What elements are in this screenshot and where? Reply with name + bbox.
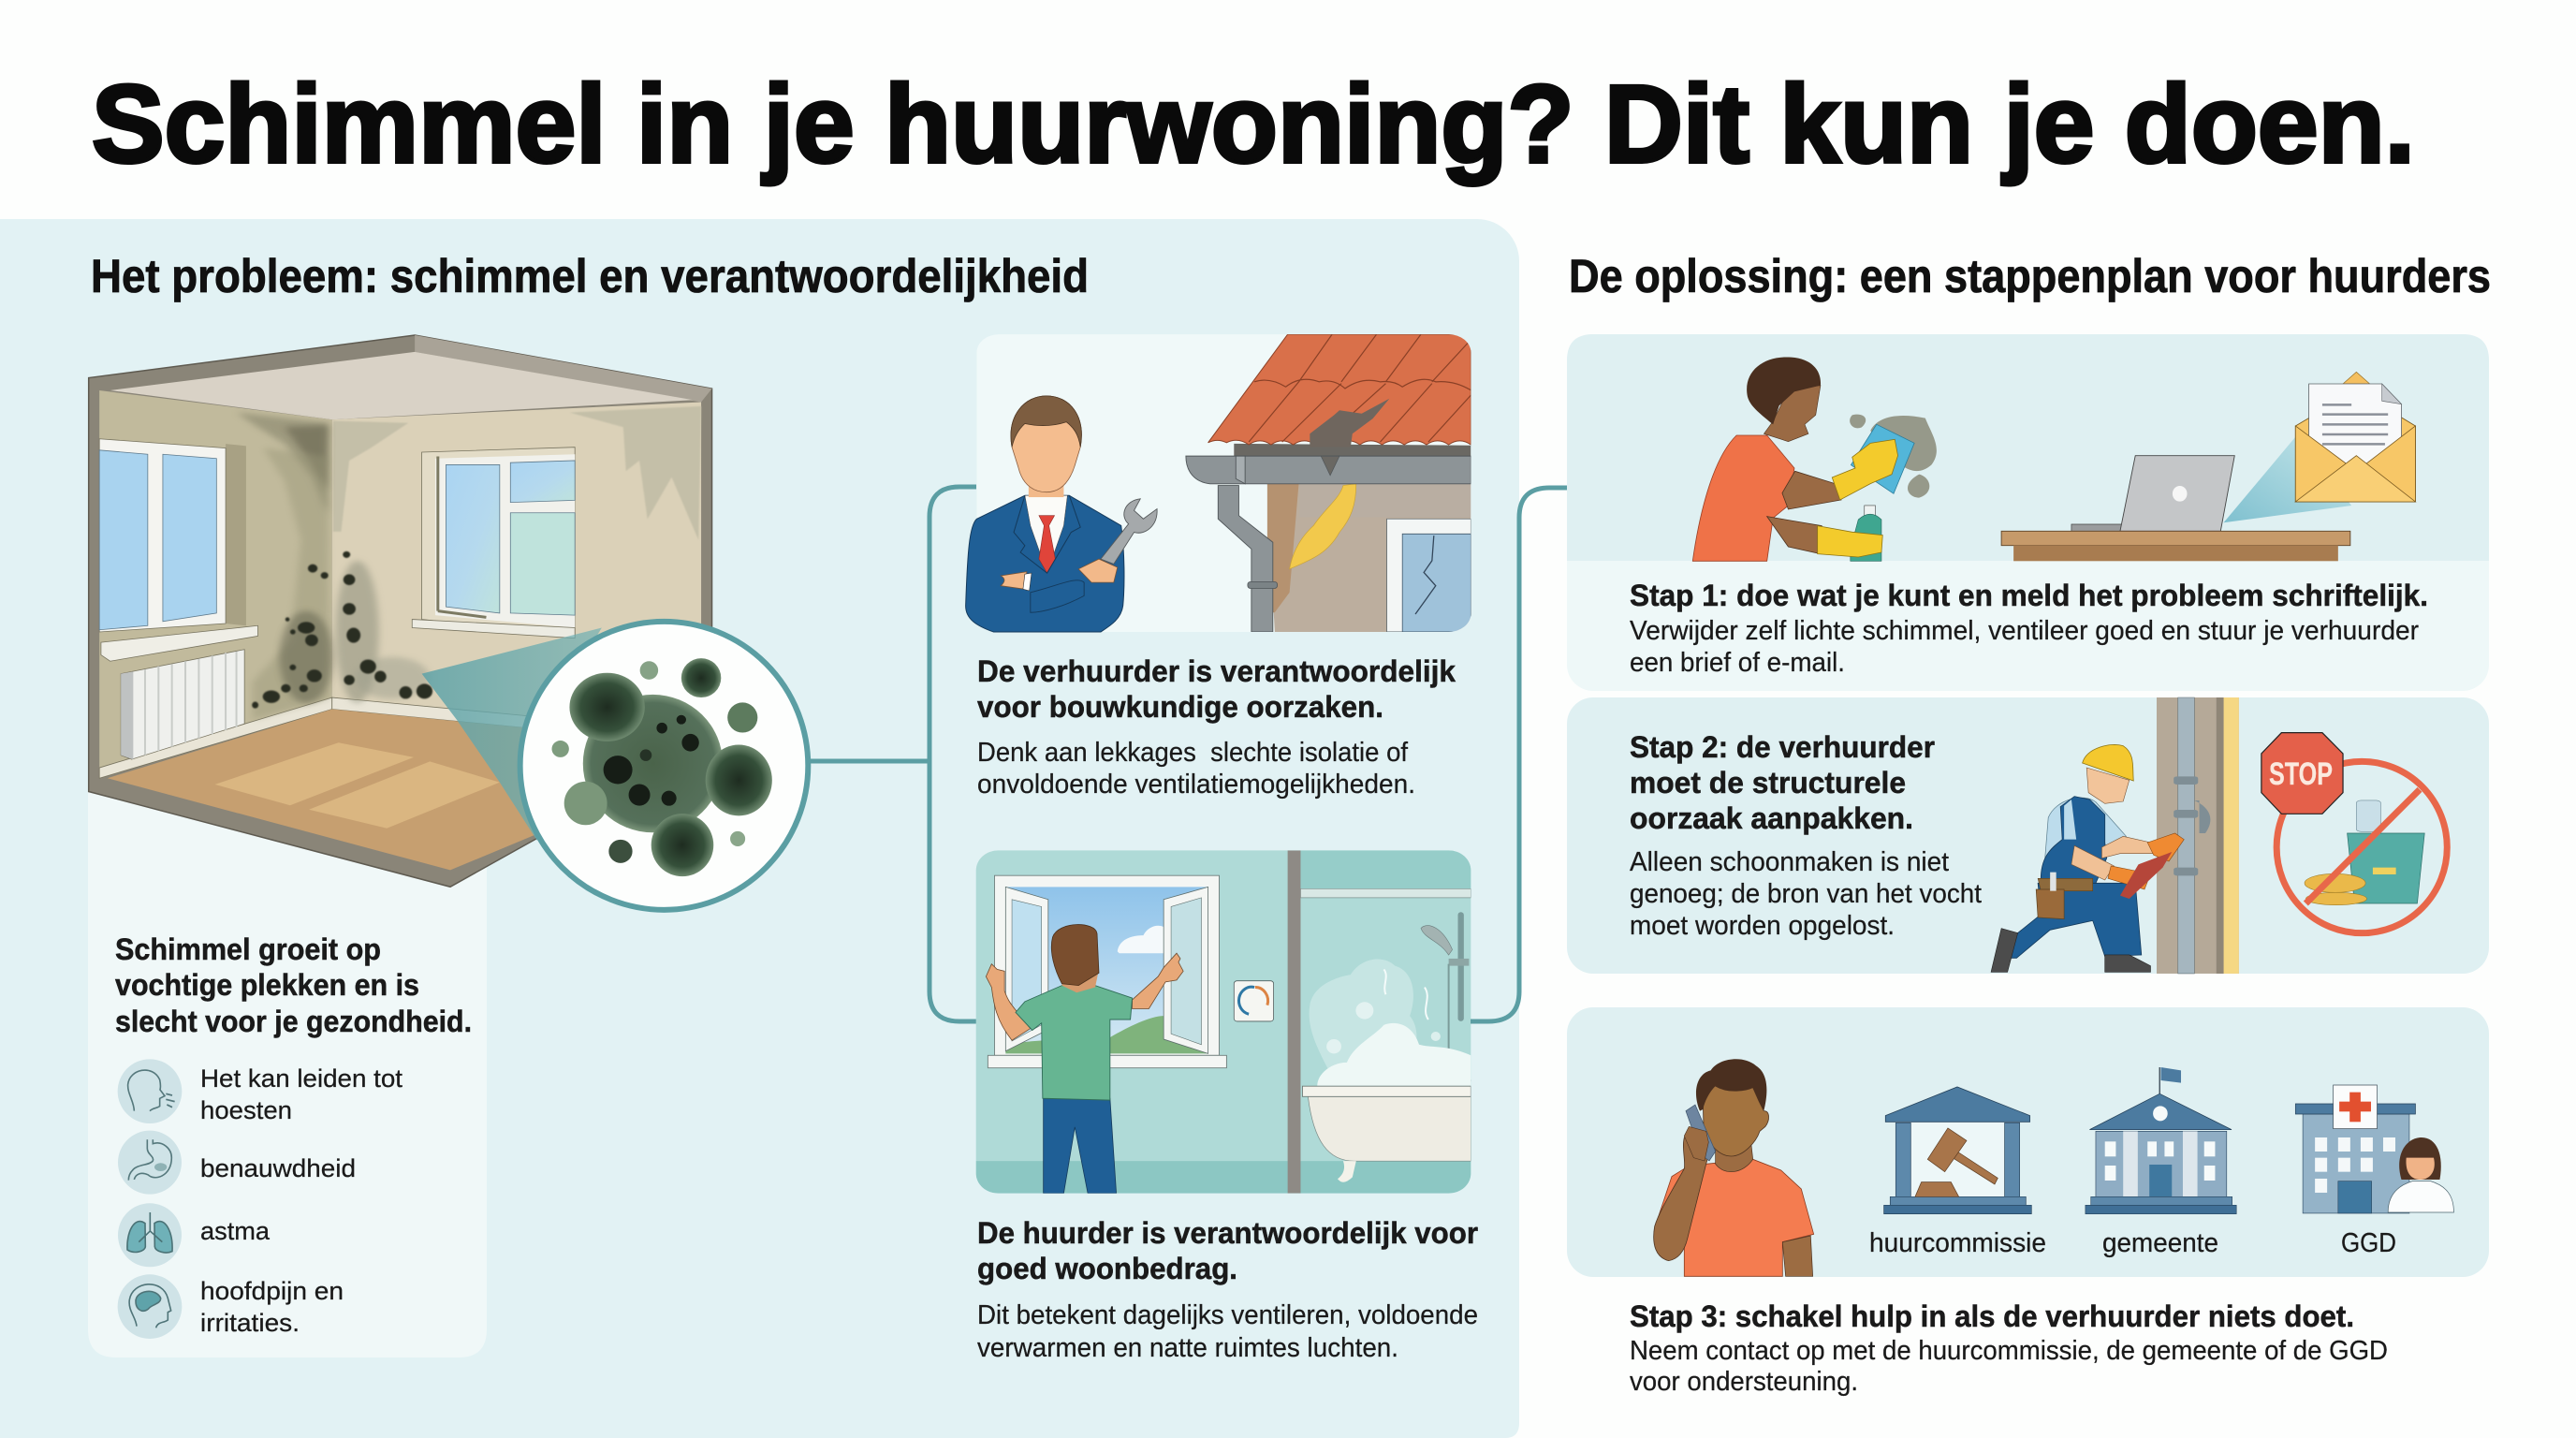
text: hoofdpijn: hoofdpijn en <box>200 1277 344 1305</box>
panel: het probleem <box>0 219 1519 1438</box>
heading: de oplossing: De oplossing: een stappenplan voor huurders <box>1569 250 2491 302</box>
tekst: stap 2: moet worden opgelost. <box>1630 911 1895 941</box>
tekst: stap 2: genoeg; de bron van het vocht <box>1630 879 1982 909</box>
ventilatie dial <box>1234 981 1274 1021</box>
text: hoofdpijn <box>200 1277 344 1337</box>
kaart: verhuurder <box>966 334 1471 800</box>
tekst: stap 2: oorzaak aanpakken. <box>1630 801 1913 835</box>
icoon: GGD <box>2295 1085 2453 1213</box>
tekst: verhuurder: De verhuurder is verantwoordelijk <box>977 654 1456 688</box>
linker raam <box>99 439 258 661</box>
icon: astma <box>118 1203 182 1267</box>
tekst: verhuurder <box>977 654 1456 800</box>
tekst: huurder: Dit betekent dagelijks ventileren, voldoende <box>977 1300 1478 1330</box>
text: astma: astma <box>200 1217 271 1245</box>
icoon: stop en schoonmaakmiddelen <box>2261 733 2447 933</box>
text: hoofdpijn: irritaties. <box>200 1309 300 1337</box>
vergroting schimmel <box>520 622 808 910</box>
plint <box>99 697 701 778</box>
white health panel <box>88 777 487 1357</box>
illustratie: ventileren en badkamer <box>976 850 1471 1194</box>
icon: benauwdheid <box>118 1131 182 1195</box>
tekst: stap 3: Stap 3: schakel hulp in als de verhuurder niets doet. <box>1630 1299 2354 1333</box>
tekst: verhuurder: Denk aan lekkages slechte isolatie of <box>977 738 1409 768</box>
health heading: slecht voor je gezondheid. <box>115 1005 472 1038</box>
text: hoesten: Het kan leiden tot <box>200 1064 403 1093</box>
tekst: stap 1: Stap 1: doe wat je kunt en meld het probleem schriftelijk. <box>1630 579 2428 612</box>
vergrootglas kegel <box>422 628 602 841</box>
tekst: huurder: goed woonbedrag. <box>977 1252 1237 1285</box>
kaart: huurder <box>976 850 1478 1363</box>
health heading: Schimmel groeit op <box>115 932 381 966</box>
tekst: stap 1: Verwijder zelf lichte schimmel, ventileer goed en stuur je verhuurder <box>1630 616 2419 646</box>
text: hoesten: hoesten <box>200 1096 292 1124</box>
illustration: kamer met schimmel <box>89 335 808 910</box>
tekst: huurder: De huurder is verantwoordelijk voor <box>977 1216 1478 1250</box>
title: Schimmel in je huurwoning? Dit kun je doen. <box>92 63 2415 186</box>
linker muur <box>99 390 332 768</box>
kaart: stap 1 <box>1567 334 2489 691</box>
tekst: stap 2: moet de structurele <box>1630 766 1906 800</box>
radiator <box>121 650 244 759</box>
icon: hoesten <box>118 1059 182 1123</box>
illustratie: persoon met telefoon <box>1654 1059 1814 1276</box>
tekst: stap 2: Stap 2: de verhuurder <box>1630 730 1935 764</box>
illustratie: verhuurder en lekkend dak <box>966 334 1471 632</box>
tekst: stap 2: Alleen schoonmaken is niet <box>1630 847 1949 877</box>
icoon: gemeente <box>2086 1067 2236 1214</box>
icoon: stop en schoonmaakmiddelen: STOP <box>2269 756 2333 792</box>
figuur: verhuurder <box>966 396 1157 632</box>
bad en stoom <box>1302 912 1471 1182</box>
label: huurcommissie: huurcommissie <box>1869 1228 2046 1258</box>
text: benauwdheid: benauwdheid <box>200 1154 356 1182</box>
tekst: stap 3 <box>1630 1299 2388 1397</box>
heading: het probleem: Het probleem: schimmel en verantwoordelijkheid <box>91 250 1089 302</box>
schimmel op de muur <box>237 413 432 720</box>
connector: linker verbinding <box>807 487 976 1021</box>
illustratie: schoonmaken <box>1692 357 1937 561</box>
tekst: verhuurder: voor bouwkundige oorzaken. <box>977 690 1383 724</box>
health heading <box>115 932 472 1038</box>
tekst: huurder <box>977 1216 1478 1363</box>
tekst: stap 3: Neem contact op met de huurcommissie, de gemeente of de GGD <box>1630 1336 2388 1366</box>
raam <box>994 875 1219 1055</box>
icon: hoofdpijn <box>118 1274 182 1339</box>
icoon: huurcommissie <box>1884 1087 2031 1214</box>
tekst: huurder: verwarmen en natte ruimtes luchten. <box>977 1333 1398 1363</box>
illustratie: laptop en brief <box>2001 372 2415 561</box>
label: gemeente: gemeente <box>2102 1228 2218 1258</box>
tekst: verhuurder: onvoldoende ventilatiemogelijkheden. <box>977 770 1415 800</box>
kaart: stap 3 <box>1567 1007 2489 1397</box>
tekst: stap 1 <box>1630 579 2428 678</box>
tekst: stap 2 <box>1630 730 1982 941</box>
illustratie: loodgieter <box>1991 697 2239 974</box>
kaart: stap 2 <box>1567 697 2489 974</box>
rechter muur <box>332 402 701 741</box>
text: hoesten <box>200 1064 403 1124</box>
vloer <box>108 710 701 870</box>
label: GGD: GGD <box>2341 1228 2396 1258</box>
connector: rechter verbinding <box>1471 488 1568 1021</box>
health heading: vochtige plekken en is <box>115 968 419 1002</box>
rechter raam <box>412 448 575 638</box>
figuur: huurder <box>986 925 1183 1194</box>
tekst: stap 3: voor ondersteuning. <box>1630 1367 1858 1397</box>
tekst: stap 1: een brief of e-mail. <box>1630 648 1845 678</box>
